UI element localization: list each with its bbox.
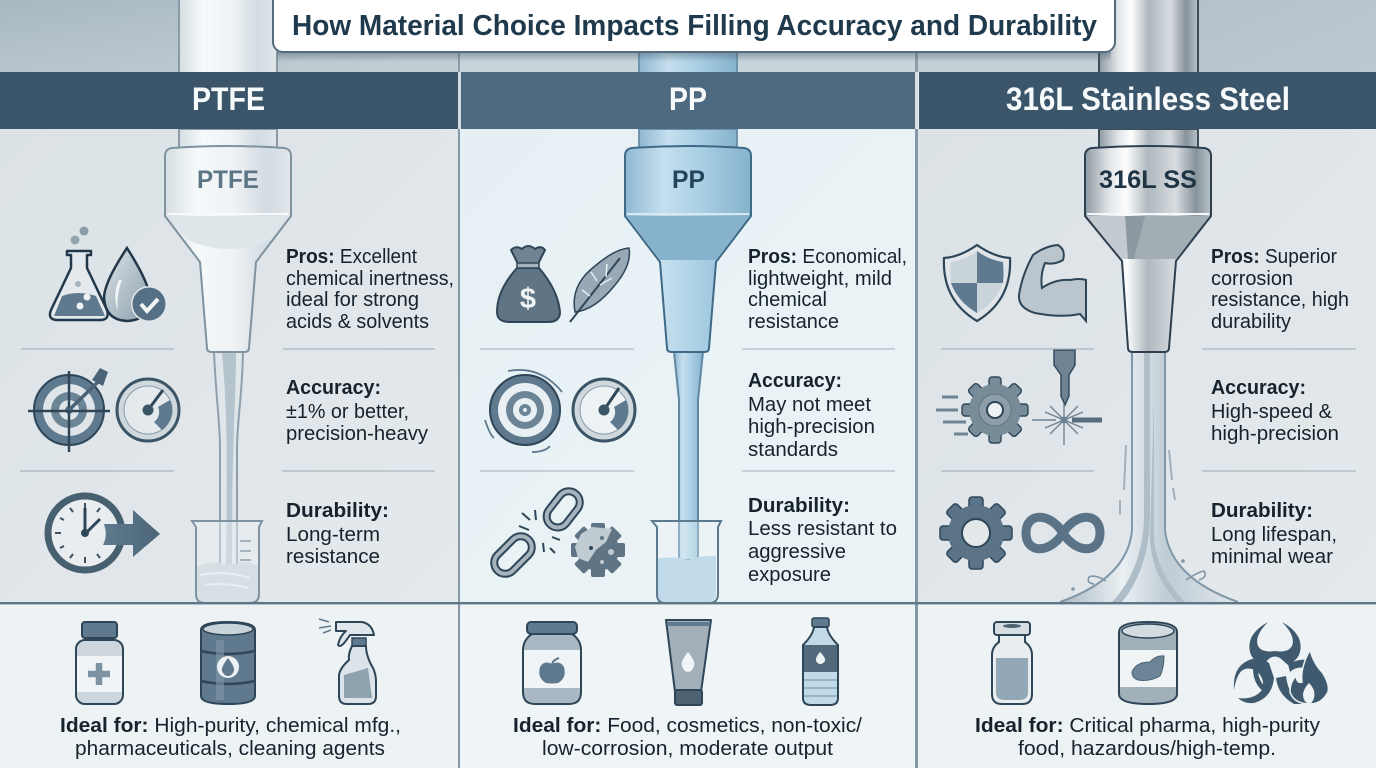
icon: broken chain and corroded gear <box>490 487 625 578</box>
text: PTFE pros: chemical inertness, <box>286 268 454 290</box>
nozzle: PP: PP <box>672 166 705 194</box>
panel: PTFE column <box>0 0 459 768</box>
text: PP ideal for: low-corrosion, moderate output <box>542 738 833 760</box>
text: PP accuracy: high-precision <box>748 416 875 438</box>
top backdrop: PTFE <box>0 0 459 72</box>
text: PP ideal for: Ideal for: Food, cosmetics, non-toxic/ <box>513 715 862 737</box>
text: PTFE ideal for: pharmaceuticals, cleaning agents <box>75 738 385 760</box>
top backdrop: PP <box>460 0 916 72</box>
supply tube lower: PP <box>639 129 737 149</box>
body background: 316L <box>918 129 1376 603</box>
dispensing stream: PP <box>674 352 703 560</box>
panel: 316L stainless steel column <box>918 0 1376 768</box>
text: PP pros: resistance <box>748 311 839 333</box>
icon: water bottle <box>803 618 838 705</box>
text: PTFE pros: Pros: Excellent <box>286 246 417 268</box>
text: PTFE pros: acids & solvents <box>286 311 429 333</box>
dispensing stream: 316L <box>1060 352 1238 602</box>
text: PP accuracy: Accuracy: <box>748 370 842 392</box>
icon: gear and infinity <box>940 497 1100 569</box>
icon: spray bottle <box>319 619 376 704</box>
text: 316L accuracy: high-precision <box>1211 423 1339 445</box>
divider: pros <box>20 349 435 471</box>
top backdrop right: 316L <box>1198 0 1376 72</box>
nozzle: PP <box>625 146 751 352</box>
text: 316L durability: Durability: <box>1211 500 1313 522</box>
icon: money bag and feather: $ <box>520 283 536 315</box>
text: PTFE durability: resistance <box>286 546 380 568</box>
text: PTFE pros: ideal for strong <box>286 289 419 311</box>
footer panel: PP ideal uses <box>460 604 916 768</box>
text: PTFE ideal for: Ideal for: High-purity, chemical mfg., <box>60 715 401 737</box>
header band: PTFE <box>0 72 458 129</box>
text: 316L accuracy: Accuracy: <box>1211 377 1306 399</box>
icon: food jar <box>523 622 581 704</box>
text: PP pros: lightweight, mild <box>748 268 892 290</box>
text: PTFE pros <box>286 246 454 333</box>
text: PP pros: Pros: Economical, <box>748 246 907 268</box>
nozzle: PTFE <box>165 146 291 352</box>
text: 316L ideal for <box>975 715 1320 760</box>
panel: PP column <box>460 0 916 768</box>
icon: target with gauge <box>28 368 179 452</box>
text: 316L pros: Pros: Superior <box>1211 246 1337 268</box>
text: 316L ideal for: Ideal for: Critical pharma, high-purity <box>975 715 1320 737</box>
text: 316L durability: minimal wear <box>1211 546 1333 568</box>
text: PP pros: chemical <box>748 289 827 311</box>
text: PTFE durability: Durability: <box>286 500 389 522</box>
text: 316L accuracy: High-speed & <box>1211 401 1333 423</box>
supply tube: 316L <box>1099 0 1198 150</box>
icon: food can <box>1119 622 1177 704</box>
title: How Material Choice Impacts Filling Accuracy and Durability <box>292 10 1097 42</box>
text: PP durability: exposure <box>748 564 831 586</box>
footer panel: PTFE ideal uses <box>0 604 458 768</box>
icon: chemical drum <box>201 622 255 704</box>
icon: blurred target with gauge <box>485 370 635 452</box>
text: PP pros <box>748 246 907 333</box>
text: PTFE ideal for <box>60 715 401 760</box>
text: PTFE accuracy <box>286 377 428 445</box>
title <box>273 0 1115 52</box>
header band: 316L <box>919 72 1376 129</box>
text: 316L pros <box>1211 246 1349 333</box>
text: PTFE durability: Long-term <box>286 524 380 546</box>
body background: PTFE <box>0 129 458 603</box>
divider: pros <box>480 349 895 471</box>
footer panel: 316L ideal uses <box>918 604 1376 768</box>
icon: biohazard and flame <box>1234 622 1328 704</box>
header band: PTFE: PTFE <box>192 81 265 117</box>
icon: money bag and feather <box>497 246 629 322</box>
text: 316L pros: durability <box>1211 311 1291 333</box>
text: 316L pros: resistance, high <box>1211 289 1349 311</box>
text: 316L durability: Long lifespan, <box>1211 524 1337 546</box>
text: PP accuracy <box>748 370 875 461</box>
supply tube: PTFE <box>179 0 277 150</box>
text: PP accuracy: May not meet <box>748 394 871 416</box>
text: PP ideal for <box>513 715 862 760</box>
header band: PP <box>461 72 915 129</box>
text: PTFE accuracy: precision-heavy <box>286 423 428 445</box>
text: PP durability: Less resistant to <box>748 518 897 540</box>
top backdrop: 316L <box>918 0 1099 72</box>
nozzle: 316L: 316L SS <box>1099 166 1197 194</box>
divider: pros <box>941 349 1356 471</box>
icon: medicine bottle <box>76 622 123 704</box>
title shadow <box>277 52 1111 62</box>
text: 316L accuracy <box>1211 377 1339 445</box>
icon: cosmetic tube <box>666 620 711 705</box>
text: 316L ideal for: food, hazardous/high-temp. <box>1018 738 1276 760</box>
icon: shield and flexed arm <box>944 245 1086 321</box>
text: PTFE durability <box>286 500 389 568</box>
icon: fast gear and laser <box>936 350 1102 445</box>
body background: PP <box>460 129 916 603</box>
text: 316L pros: corrosion <box>1211 268 1293 290</box>
text: PP durability: Durability: <box>748 495 850 517</box>
beaker: PP <box>652 521 721 603</box>
text: PP durability <box>748 495 897 586</box>
dispensing stream: PTFE <box>214 352 243 565</box>
text: PP durability: aggressive <box>748 541 846 563</box>
text: 316L durability <box>1211 500 1337 568</box>
icon: flask and droplet with check <box>50 226 167 322</box>
supply tube lower: 316L <box>1099 129 1198 149</box>
header band: PP: PP <box>669 81 707 117</box>
header band: 316L: 316L Stainless Steel <box>1006 81 1290 117</box>
supply tube: PP <box>639 0 737 150</box>
beaker: PTFE <box>192 521 262 603</box>
text: PTFE accuracy: ±1% or better, <box>286 401 409 423</box>
icon: pharma vial <box>992 622 1032 704</box>
text: PTFE accuracy: Accuracy: <box>286 377 381 399</box>
nozzle: 316L <box>1085 146 1211 352</box>
icon: clock with forward arrow <box>48 496 160 570</box>
text: PP accuracy: standards <box>748 439 838 461</box>
supply tube lower: PTFE <box>179 129 277 149</box>
nozzle: PTFE: PTFE <box>197 166 259 194</box>
